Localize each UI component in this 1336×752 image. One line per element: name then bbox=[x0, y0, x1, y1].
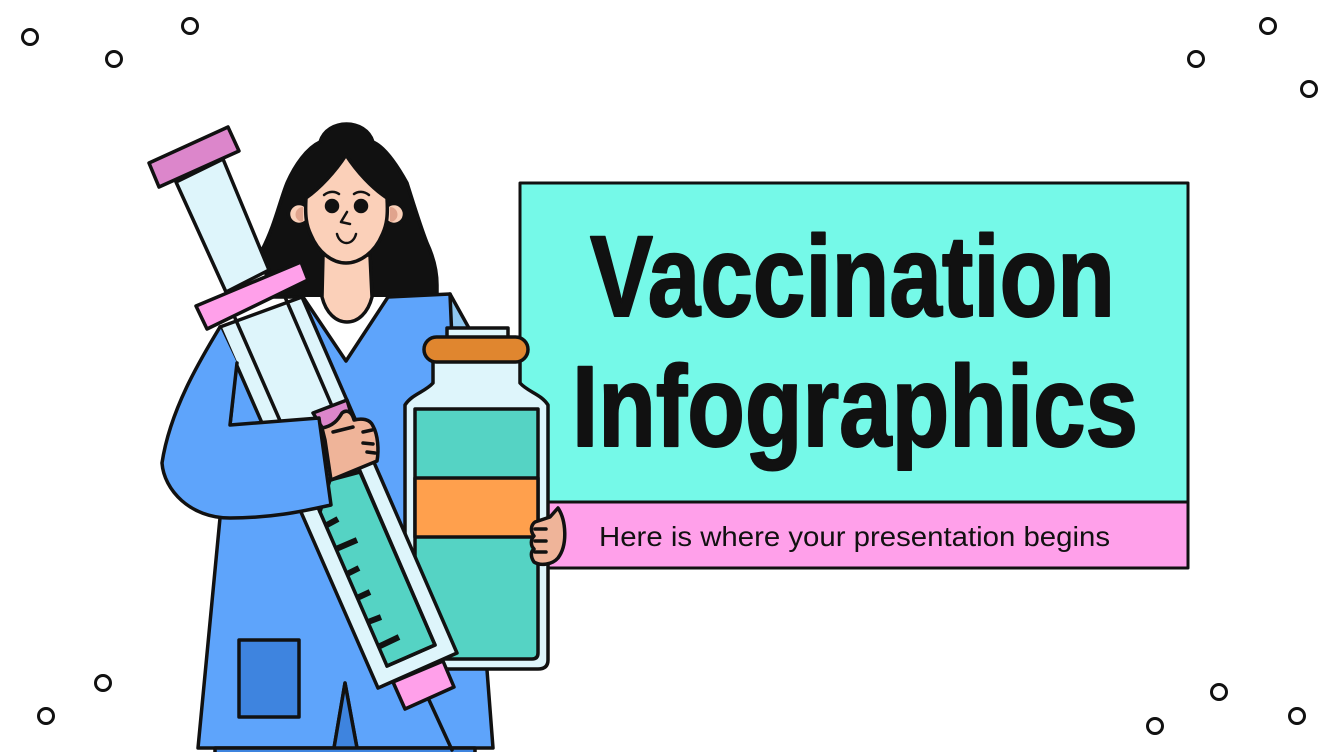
ears bbox=[288, 204, 404, 224]
syringe bbox=[149, 127, 457, 750]
neck bbox=[322, 255, 372, 322]
plunger base bbox=[313, 400, 353, 432]
plunger rod bbox=[176, 159, 269, 292]
plunger cap bbox=[149, 127, 239, 187]
barrel inner lines bbox=[235, 297, 435, 666]
subtitle banner: Here is where your presentation begins bbox=[599, 521, 1110, 552]
face bbox=[306, 155, 387, 263]
white shirt bbox=[303, 297, 388, 361]
needle hub bbox=[393, 661, 454, 709]
hair bbox=[262, 124, 437, 297]
shoulder fold bbox=[448, 294, 470, 350]
right hand bbox=[531, 508, 565, 564]
flange bbox=[196, 262, 308, 329]
title panel bbox=[520, 183, 1188, 502]
needle bbox=[429, 700, 452, 750]
subtitle banner bbox=[520, 502, 1188, 568]
title: Vaccination bbox=[590, 213, 1115, 341]
coat bbox=[198, 294, 493, 748]
graduation marks bbox=[325, 519, 399, 647]
liquid bbox=[320, 472, 435, 666]
title bbox=[572, 213, 1138, 471]
barrel bbox=[220, 297, 457, 688]
trousers bbox=[215, 683, 475, 752]
pocket bbox=[239, 640, 299, 717]
facial features bbox=[324, 192, 369, 243]
illustration: nurse with syringe and vial bbox=[149, 124, 565, 752]
left hand bbox=[322, 411, 378, 480]
sleeve bbox=[162, 327, 331, 518]
vial bbox=[405, 328, 548, 669]
title: Infographics bbox=[572, 343, 1138, 471]
